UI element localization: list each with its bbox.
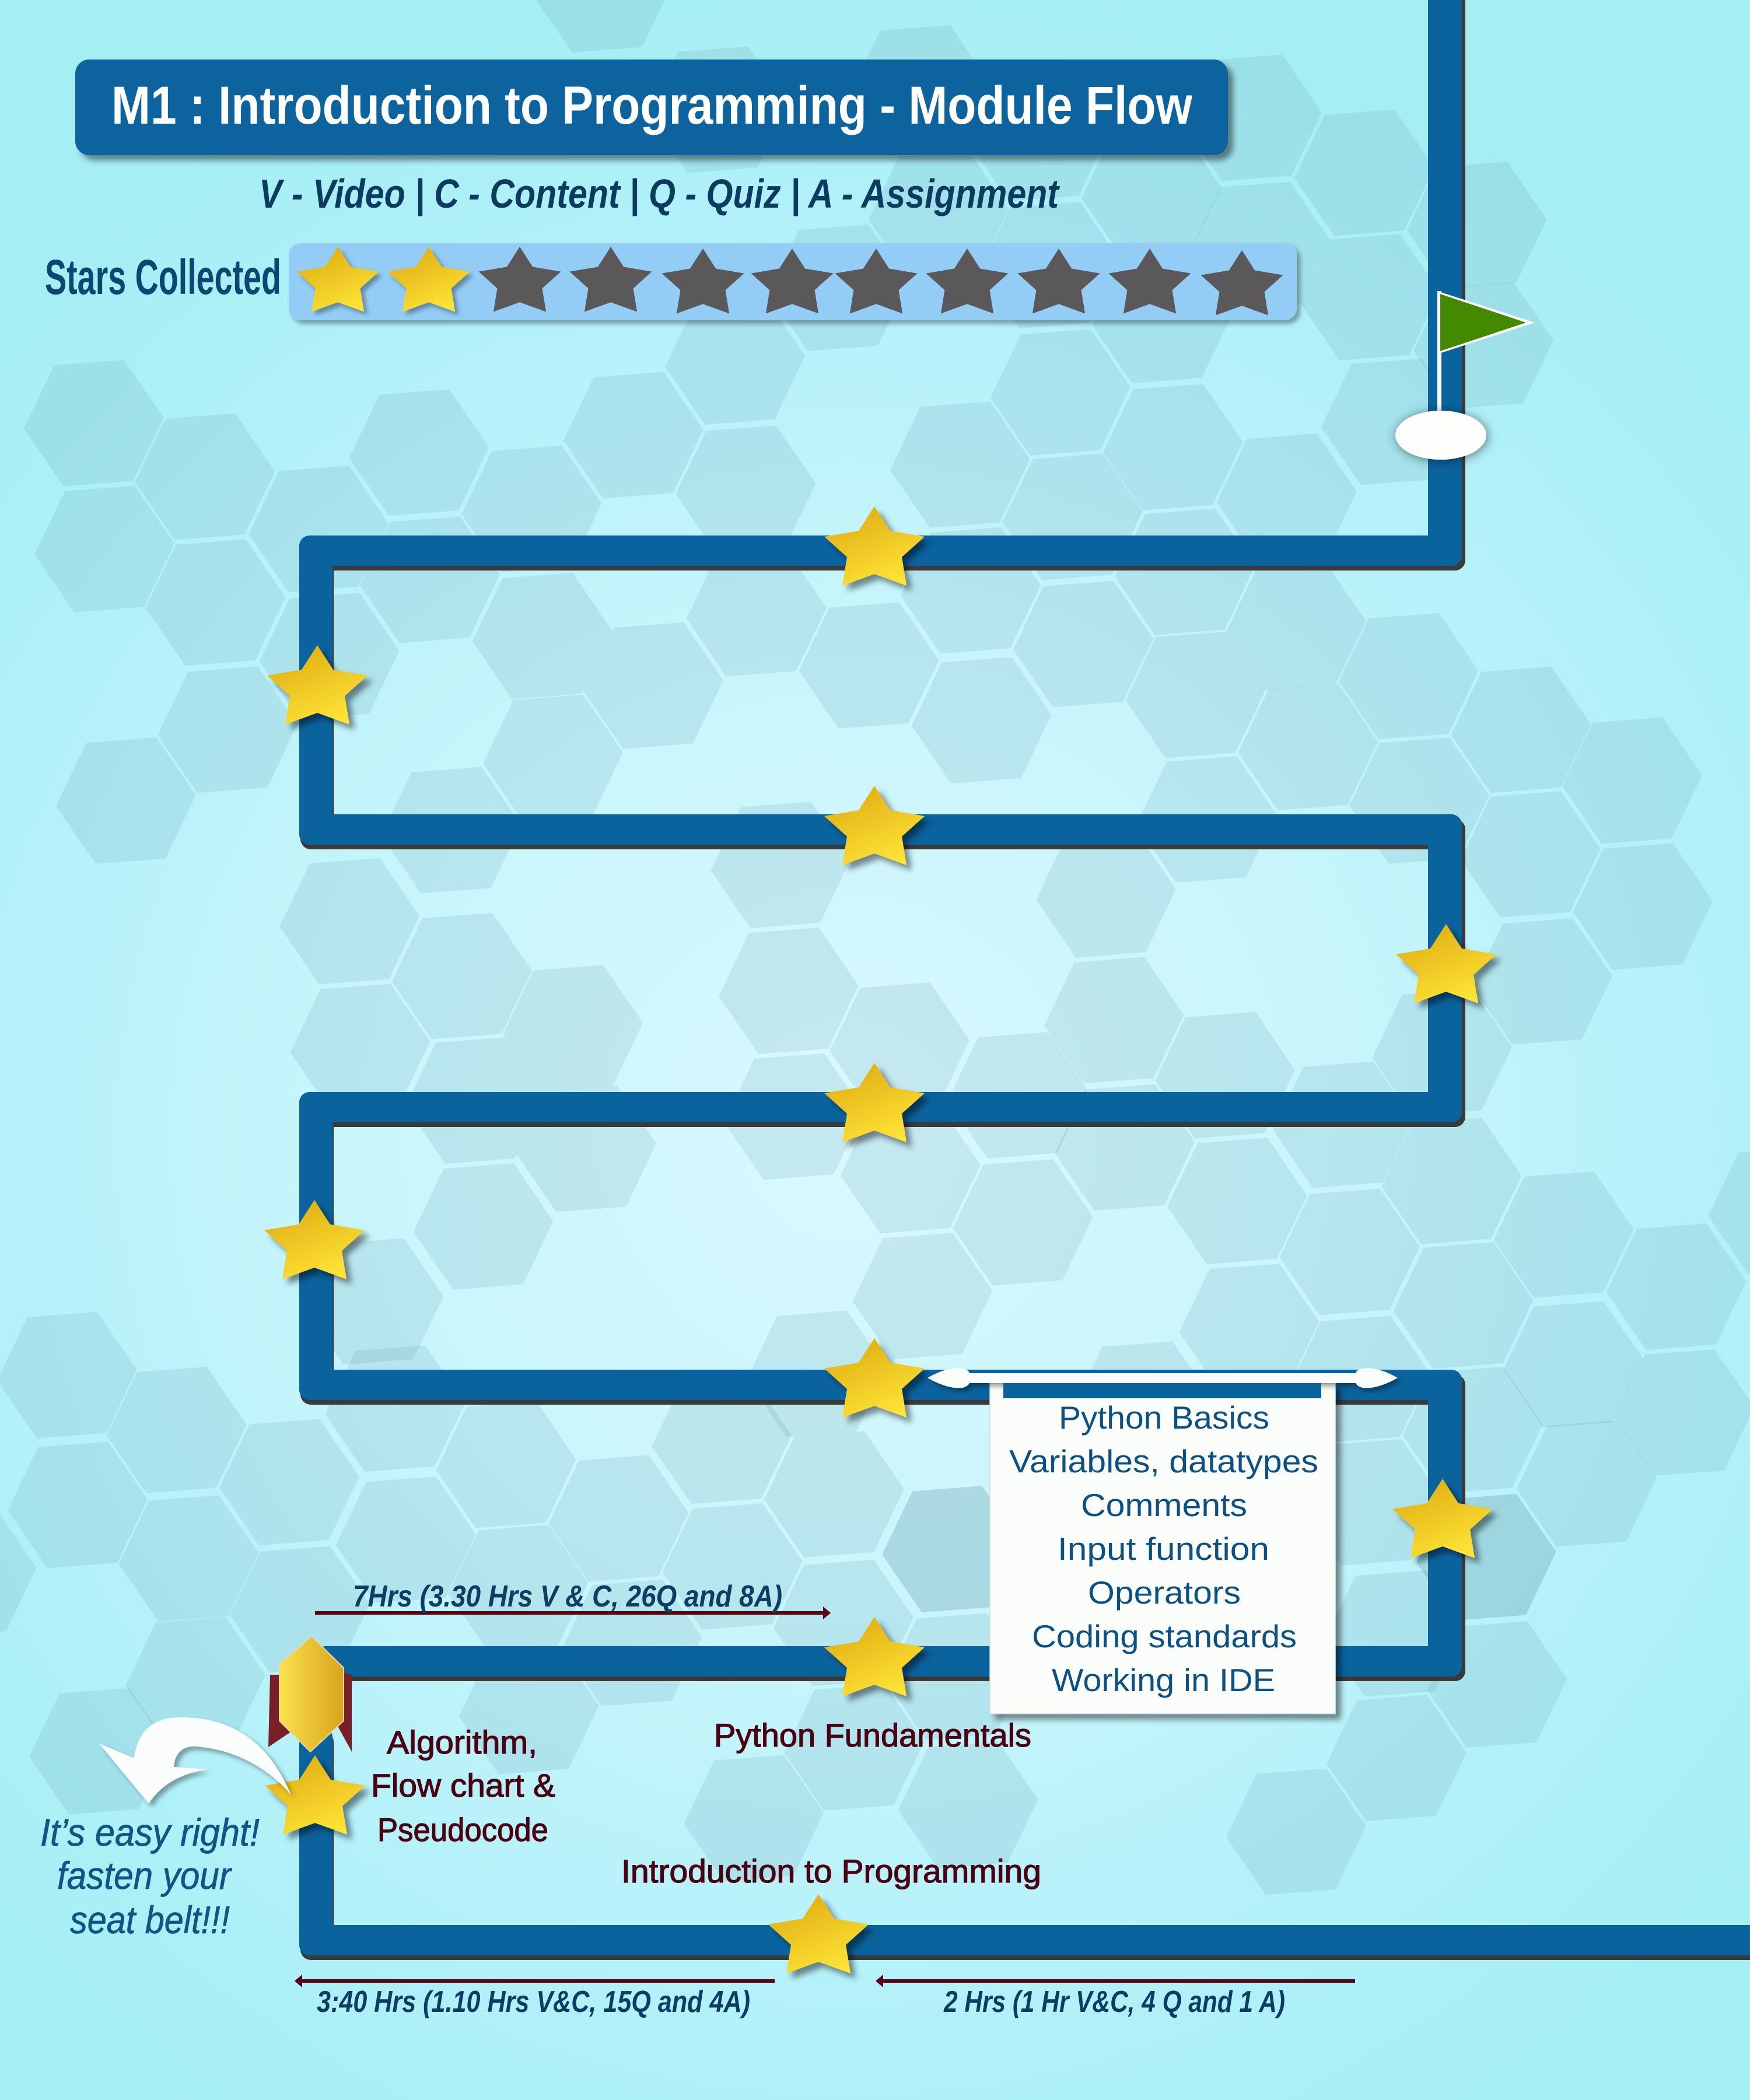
duration: 3:40 hours: 3:40 Hrs (1.10 Hrs V&C, 15Q and 4A) xyxy=(317,1985,750,2019)
title banner xyxy=(75,60,1228,155)
arrow: 2 hours xyxy=(876,1975,1355,1987)
card rod xyxy=(928,1368,1398,1388)
arrow: 7 hours xyxy=(315,1606,831,1619)
stars collected label: Stars Collected xyxy=(45,250,281,304)
medal badge xyxy=(268,1636,352,1752)
label: python fundamentals: Python Fundamentals xyxy=(714,1717,1031,1754)
road shadow xyxy=(300,0,1750,1960)
card lines: Coding standards xyxy=(1032,1618,1297,1654)
label: introduction to programming: Introduction to Programming xyxy=(621,1853,1041,1889)
encouragement note: It’s easy right! xyxy=(40,1811,260,1854)
topic card: python basics xyxy=(928,1368,1398,1714)
card lines: Working in IDE xyxy=(1052,1662,1275,1698)
uncollected stars xyxy=(478,247,1283,316)
card lines: Operators xyxy=(1088,1574,1241,1611)
arrow: 3:40 hours xyxy=(295,1975,775,1987)
path stars xyxy=(264,506,1496,1973)
hole ellipse xyxy=(1395,411,1486,460)
card lines: Variables, datatypes xyxy=(1009,1443,1318,1479)
winding road path xyxy=(299,0,1750,1955)
card lines: Input function xyxy=(1058,1531,1269,1567)
encouragement note: fasten your xyxy=(57,1854,233,1897)
card lines: Python Basics xyxy=(1059,1399,1269,1436)
flag xyxy=(1437,291,1535,354)
label: algorithm topic: Pseudocode xyxy=(377,1811,548,1848)
label: algorithm topic xyxy=(371,1724,555,1848)
card body xyxy=(990,1383,1335,1714)
card blue band xyxy=(1003,1383,1321,1398)
legend text: V - Video | C - Content | Q - Quiz | A - Assignment xyxy=(259,171,1060,216)
card lines xyxy=(1009,1399,1318,1698)
duration: 7 hours: 7Hrs (3.30 Hrs V & C, 26Q and 8A) xyxy=(353,1580,782,1614)
flag pole xyxy=(1437,291,1441,414)
label: algorithm topic: Algorithm, xyxy=(387,1724,537,1760)
label: algorithm topic: Flow chart & xyxy=(371,1767,555,1804)
flag and hole xyxy=(1395,291,1535,460)
duration: 2 hours: 2 Hrs (1 Hr V&C, 4 Q and 1 A) xyxy=(943,1985,1285,2019)
stars collected bar xyxy=(289,243,1297,320)
card lines: Comments xyxy=(1081,1487,1247,1523)
white curved arrow xyxy=(99,1717,291,1804)
title banner: M1 : Introduction to Programming - Module Flow xyxy=(111,76,1192,135)
encouragement note: seat belt!!! xyxy=(70,1898,230,1941)
encouragement note xyxy=(40,1811,260,1941)
collected stars xyxy=(296,247,470,312)
